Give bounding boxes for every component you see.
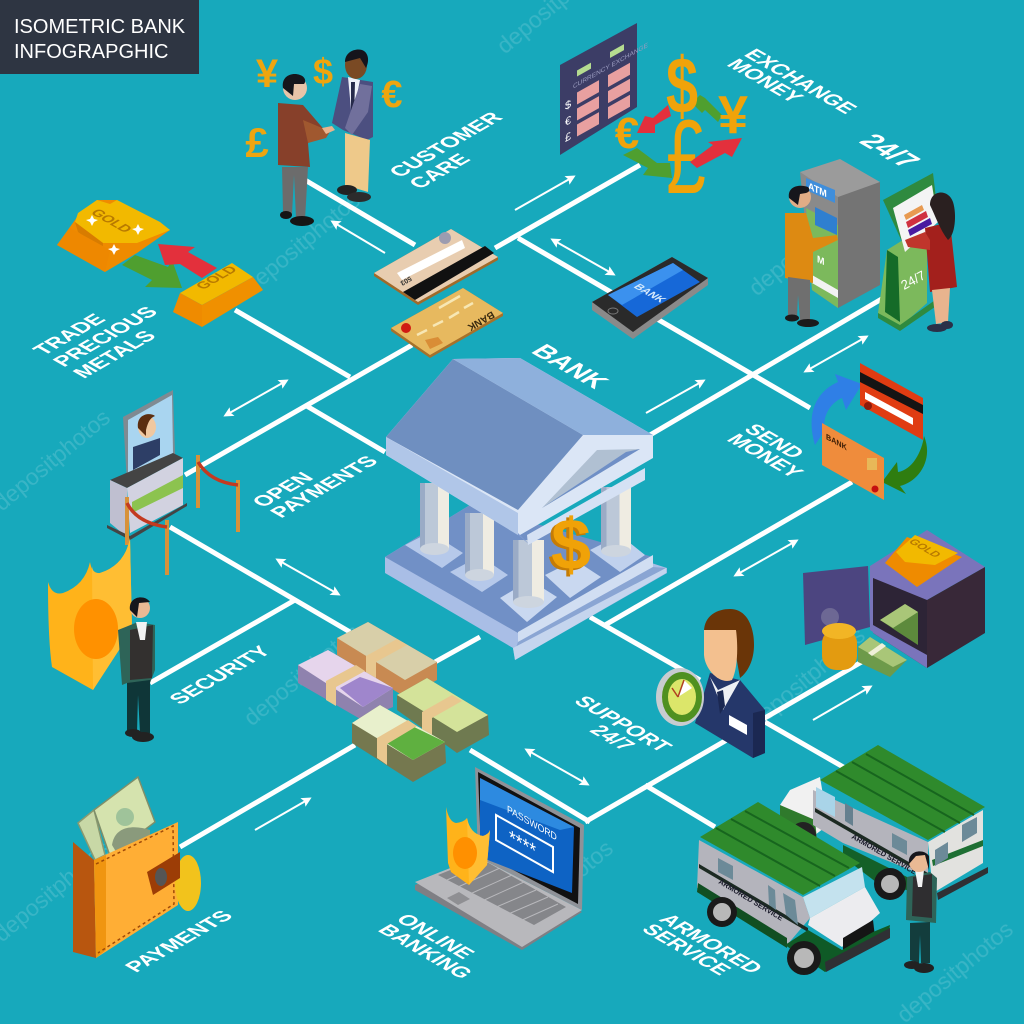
icon: exchange board and currency: € xyxy=(565,112,572,129)
icon: gold bars and arrows: GOLD xyxy=(192,263,241,292)
icon: customer care people: ¥ xyxy=(256,52,279,96)
icon: exchange board and currency: CURRENCY EXCHANGE xyxy=(573,42,648,91)
icon: exchange board and currency: $ xyxy=(565,96,572,113)
label: armored service: SERVICE xyxy=(636,921,736,978)
title box xyxy=(0,0,199,74)
label: send money xyxy=(721,421,825,481)
label: exchange money: MONEY xyxy=(721,56,808,106)
icon: shield and guard xyxy=(48,538,155,742)
label: support 24/7: SUPPORT xyxy=(569,693,677,755)
label: armored service: ARMORED xyxy=(654,911,767,977)
icon: laptop with shield xyxy=(415,767,584,950)
label: support 24/7: 24/7 xyxy=(584,722,640,754)
label: open payments: OPEN xyxy=(247,469,319,511)
icon: smartphone xyxy=(592,257,708,339)
icon: laptop with shield: PASSWORD xyxy=(507,804,557,844)
icon: exchange board and currency: £ xyxy=(666,99,706,216)
icon: customer care people xyxy=(245,50,403,226)
icon: credit cards: BANK xyxy=(465,308,496,333)
label: trade precious metals: TRADE xyxy=(28,311,111,359)
icon: ATM and kiosk xyxy=(785,159,957,332)
label: send money: MONEY xyxy=(721,431,808,481)
text: depositphotos xyxy=(492,835,618,947)
label: trade precious metals xyxy=(28,292,183,382)
icon: wallet with cash xyxy=(73,777,201,958)
label: open payments: PAYMENTS xyxy=(266,453,383,521)
icon: armored truck rear xyxy=(780,745,988,900)
icon: smartphone: BANK xyxy=(630,282,668,304)
icon: gold bars and arrows: GOLD xyxy=(87,206,136,235)
icon: exchange board and currency xyxy=(560,23,748,216)
icon: ATM and kiosk: M xyxy=(817,254,824,268)
label: send money: SEND xyxy=(739,421,809,462)
label: security: SECURITY xyxy=(164,643,276,708)
icon: safe with gold xyxy=(803,530,985,677)
text: depositphotos xyxy=(492,404,618,516)
icon: exchange board and currency: £ xyxy=(565,128,572,145)
icon: credit cards xyxy=(374,229,503,358)
label: trade precious metals: PRECIOUS xyxy=(48,304,163,370)
icon: exchange board and currency: ¥ xyxy=(718,85,748,145)
icon: bank building: $ xyxy=(548,507,588,587)
icon: armored truck front xyxy=(697,802,937,975)
icon: credit cards: 503 xyxy=(399,274,412,286)
icon: bank building: $ xyxy=(551,505,591,585)
arrows xyxy=(226,177,870,830)
text: depositphotos xyxy=(239,187,365,299)
icon: customer care people: £ xyxy=(245,119,269,166)
label: customer care: CARE xyxy=(404,151,476,192)
icon: armored truck rear: ARMORED SERVICE xyxy=(850,832,918,877)
title box: ISOMETRIC BANK xyxy=(14,16,186,38)
label: online banking: BANKING xyxy=(372,921,477,982)
label: 24/7: 24/7 xyxy=(853,129,927,172)
icon: exchange board and currency: $ xyxy=(666,41,698,130)
icon: bank building xyxy=(385,358,667,660)
label: customer care: CUSTOMER xyxy=(384,109,508,181)
text: depositphotos xyxy=(239,619,365,731)
icon: send money cards: BANK xyxy=(826,432,847,453)
icon: safe with gold: GOLD xyxy=(905,537,943,559)
icon: ATM and kiosk: ATM xyxy=(808,181,827,200)
label: trade precious metals: METALS xyxy=(68,328,162,382)
icon: armored truck front: ARMORED SERVICE xyxy=(717,877,785,923)
title box: INFOGRAPGHIC xyxy=(14,41,168,63)
label: exchange money: EXCHANGE xyxy=(739,46,862,117)
icon: customer care people: € xyxy=(381,74,403,116)
icon: exchange board and currency: € xyxy=(615,109,639,158)
label: payments: PAYMENTS xyxy=(120,907,238,976)
label: bank: BANK xyxy=(525,340,616,393)
icon: support agent xyxy=(656,609,765,758)
label: online banking: ONLINE xyxy=(391,911,479,962)
icon: photo id stand xyxy=(107,390,238,575)
icon: ATM and kiosk: 24/7 xyxy=(898,268,928,293)
text: depositphotos xyxy=(744,622,870,734)
icon: send money cards xyxy=(812,363,927,500)
icon: money stacks xyxy=(298,622,489,782)
icon: gold bars and arrows xyxy=(57,200,263,327)
icon: laptop with shield: **** xyxy=(509,826,536,864)
text: depositphotos xyxy=(744,189,870,301)
icon: customer care people: $ xyxy=(313,51,333,92)
